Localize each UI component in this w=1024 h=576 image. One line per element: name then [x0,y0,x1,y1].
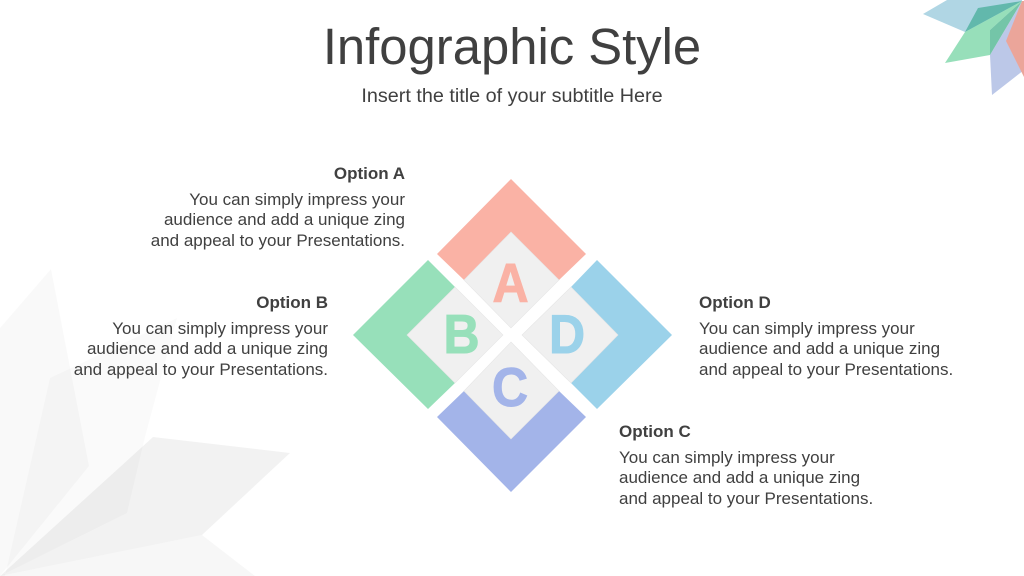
title: Infographic Style [323,18,701,75]
text block: Option D [699,293,953,379]
text block: Option A [151,164,405,250]
text block: Option A: audience and add a unique zing [164,210,405,229]
text block: Option C: Option C [619,422,691,441]
segment A [437,179,586,328]
segment C: C [492,357,528,418]
text block: Option A: You can simply impress your [189,190,405,209]
text block: Option C: audience and add a unique zing [619,468,860,487]
text block: Option C: and appeal to your Presentations. [619,489,873,508]
segment A: A [492,252,529,314]
segment C [437,342,586,492]
corner decoration: coloured leaves [923,0,1024,95]
text block: Option A: and appeal to your Presentations. [151,231,405,250]
text block: Option D: and appeal to your Presentations. [699,360,953,379]
text block: Option D: You can simply impress your [699,319,915,338]
text block: Option D: audience and add a unique zing [699,339,940,358]
text block: Option B: and appeal to your Presentations. [74,360,328,379]
segment B: B [443,304,480,366]
segment B [353,260,503,409]
text block: Option B: You can simply impress your [112,319,328,338]
text block: Option B: Option B [256,293,328,312]
text block: Option A: Option A [334,164,405,183]
text block: Option D: Option D [699,293,771,312]
subtitle: Insert the title of your subtitle Here [361,85,663,107]
diamond diagram [353,179,672,492]
text block: Option B: audience and add a unique zing [87,339,328,358]
text block: Option C [619,422,873,508]
segment D [522,260,672,409]
text block: Option B [74,293,328,379]
text block: Option C: You can simply impress your [619,448,835,467]
segment D: D [549,304,585,366]
